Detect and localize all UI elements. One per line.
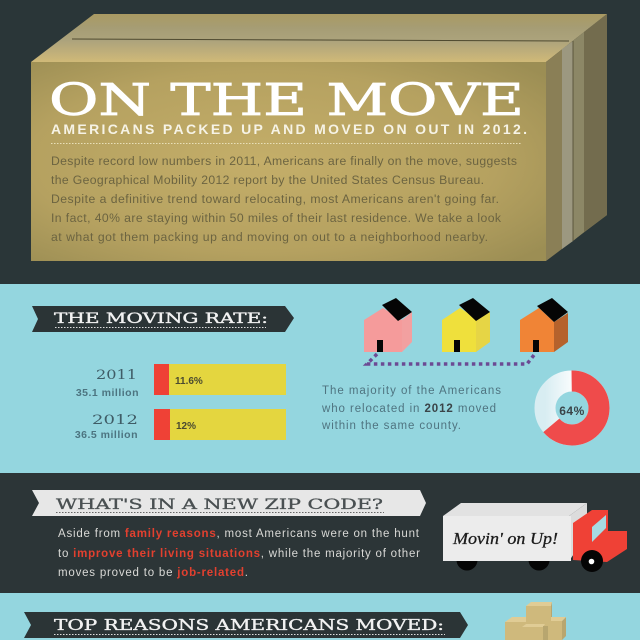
banner: the moving rate: THE MOVING RATE:: [54, 311, 268, 327]
text: majority of americans: within the same county.: [321, 420, 461, 432]
bar: 2012: 12%: [176, 421, 196, 432]
subtitle: AMERICANS PACKED UP AND MOVED ON OUT IN 2012.: [51, 121, 527, 137]
panel: moving rate background: [0, 284, 640, 473]
intro text block: the Geographical Mobility 2012 report by the United States Census Bureau.: [51, 173, 484, 187]
panel: zip code background: [0, 473, 640, 593]
icon: moving truck: [443, 503, 627, 572]
divider: [51, 142, 522, 144]
background: dark header band: [0, 0, 640, 284]
icon: yellow house: [442, 298, 490, 352]
icon: orange house: [520, 298, 568, 352]
text: majority of americans: who relocated in 2012 moved: [321, 403, 496, 415]
banner: the moving rate: [32, 306, 294, 332]
intro text block: at what got them packing up and moving on out to a neighborhood nearby.: [51, 230, 488, 244]
text: majority of americans: The majority of the Americans: [322, 385, 501, 397]
label: 2011: 2011: [96, 368, 137, 383]
label: 2012: [75, 413, 138, 441]
banner: what's in a new zip code: WHAT'S IN A NEW ZIP CODE?: [56, 497, 383, 513]
icon: stacked boxes: [505, 602, 566, 640]
banner: top reasons americans moved: [24, 612, 468, 638]
bar chart: moving rate: [75, 364, 286, 441]
cardboard box: [31, 14, 607, 261]
dotted path between houses: [367, 354, 534, 364]
text: zip code reasons: to improve their living situations, while the majority of other: [58, 548, 420, 560]
truck cargo box: [443, 503, 587, 561]
intro text block: Despite record low numbers in 2011, Americans are finally on the move, suggests: [51, 154, 517, 168]
front wheel: [581, 550, 603, 572]
intro text block: Despite a definitive trend toward relocating, most Americans aren't going far.: [51, 192, 499, 206]
text: zip code reasons: [58, 528, 420, 579]
bar: 2011: 11.6%: [175, 376, 203, 387]
banner: what's in a new zip code: [32, 490, 426, 516]
text: zip code reasons: Aside from family reasons, most Americans were on the hunt: [58, 528, 420, 540]
banner: top reasons americans moved: TOP REASONS AMERICANS MOVED:: [54, 616, 444, 634]
label: 2012: 2012: [92, 413, 138, 428]
intro text block: In fact, 40% are staying within 50 miles of their last residence. We take a look: [51, 211, 502, 225]
rear wheel: [456, 550, 478, 570]
truck cab: [573, 510, 627, 562]
bar: 2011: [154, 364, 286, 395]
donut chart: 64%: [545, 381, 599, 435]
text: majority of americans: [321, 385, 501, 432]
intro text block: [51, 154, 517, 244]
donut chart: 64%: 64%: [559, 404, 585, 418]
icon: pink house: [364, 298, 412, 352]
label: 2011: [76, 368, 139, 399]
label: 2011: 35.1 million: [76, 387, 139, 399]
bar: 2012: [154, 409, 286, 440]
text: zip code reasons: moves proved to be job-related.: [58, 567, 248, 579]
label: 2012: 36.5 million: [75, 429, 138, 441]
title: ON THE MOVE: [49, 75, 524, 126]
cab window: [592, 515, 606, 542]
middle wheel: [528, 550, 550, 570]
panel: top reasons background: [0, 593, 640, 640]
truck slogan: Movin' on Up!: [452, 529, 558, 548]
